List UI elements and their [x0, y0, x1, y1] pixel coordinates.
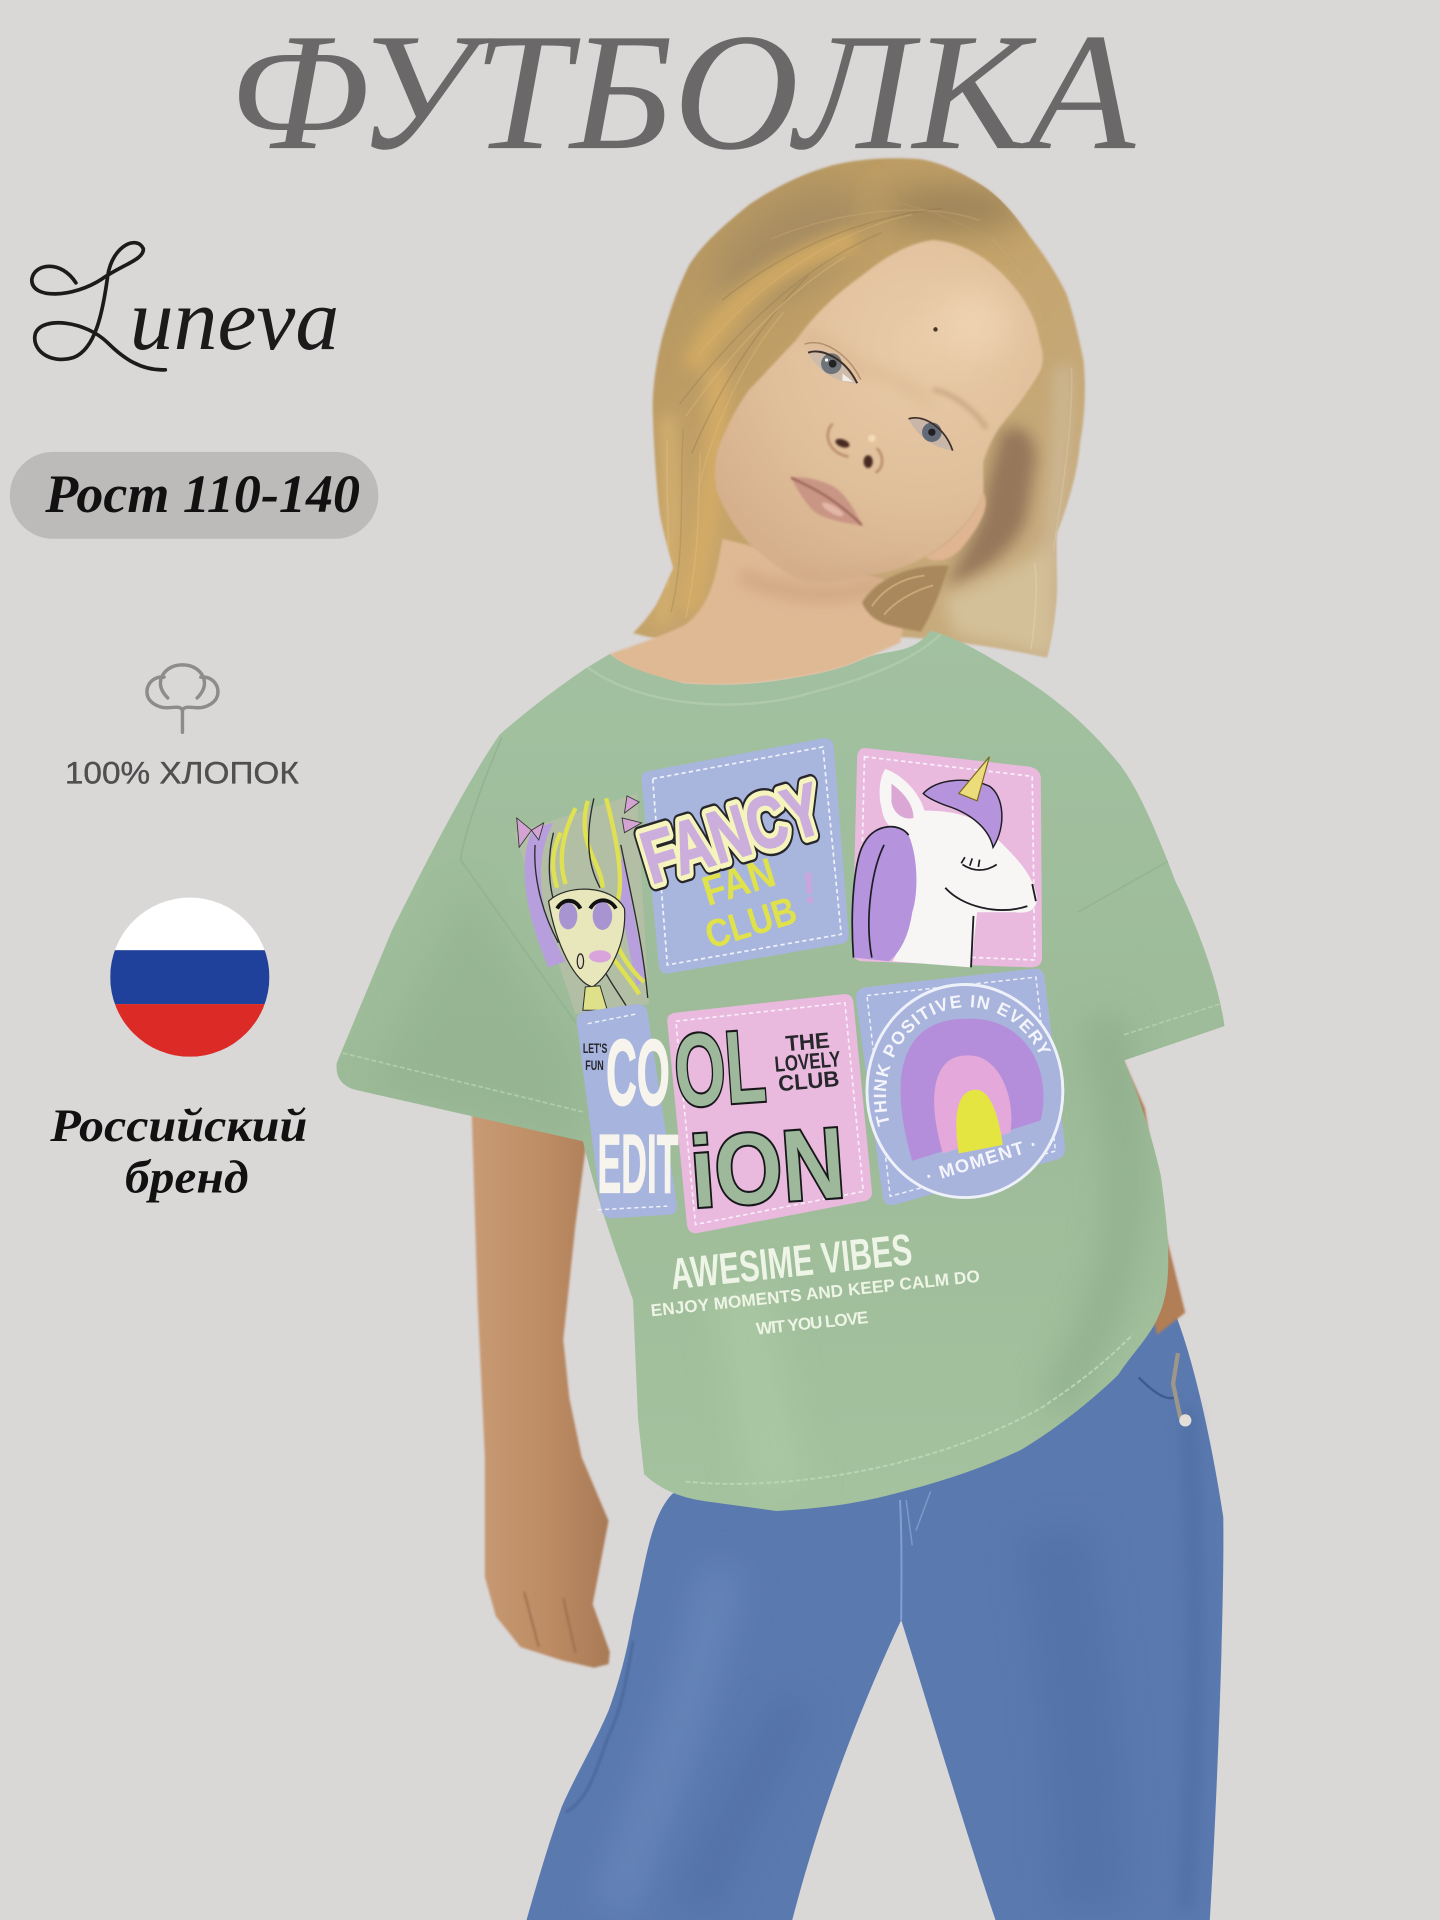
brand logo: Luneva: uneva	[130, 271, 339, 369]
mole	[933, 327, 938, 332]
neck shadow	[741, 576, 888, 595]
cool edition left blue patch: FUN	[585, 1058, 604, 1073]
fancy patch: CLUB	[700, 889, 802, 958]
height pill: Рост 110-140	[44, 464, 360, 524]
fancy patch	[632, 738, 849, 974]
shirt print	[514, 738, 1066, 1339]
brand origin text: бренд	[125, 1153, 249, 1204]
height pill	[10, 452, 378, 539]
rainbow badge patch: · MOMENT ·	[923, 1133, 1041, 1187]
fancy patch: FANCY	[632, 766, 832, 899]
left eye	[804, 343, 861, 383]
cool edition pink patch	[667, 994, 872, 1233]
slogan	[650, 1225, 981, 1339]
cotton label: 100% ХЛОПОК	[65, 755, 299, 791]
ear	[924, 492, 986, 560]
rainbow badge patch: THINK POSITIVE IN EVERY	[874, 995, 1052, 1127]
right arm	[1102, 1053, 1185, 1335]
cool edition pink patch: OL	[671, 1008, 769, 1129]
shirt	[336, 631, 1224, 1511]
unicorn patch	[852, 748, 1042, 967]
brand logo: Luneva	[32, 241, 339, 376]
cool edition pink patch: iON	[687, 1107, 849, 1229]
left arm	[471, 1102, 610, 1668]
face	[715, 240, 1043, 583]
brand origin text: Российский	[49, 1101, 307, 1152]
cool edition left blue patch	[577, 1004, 678, 1218]
icon: russian flag	[110, 898, 269, 1057]
slogan: ENJOY MOMENTS AND KEEP CALM DO	[650, 1266, 981, 1320]
right eye	[909, 417, 953, 451]
brand origin text	[49, 1101, 307, 1204]
cool edition pink patch: CLUB	[777, 1066, 840, 1096]
neck	[610, 539, 906, 685]
fancy patch: !	[800, 864, 819, 914]
facial shading	[784, 290, 1010, 576]
cool edition left blue patch: CO	[606, 1020, 670, 1124]
fancy patch: FAN	[697, 848, 781, 915]
cool edition pink patch: LOVELY	[773, 1046, 842, 1077]
fancy patch: FANCY	[632, 766, 832, 899]
nose	[828, 424, 882, 473]
slogan: WIT YOU LOVE	[755, 1307, 869, 1339]
cool edition pink patch: THE	[784, 1028, 831, 1056]
anime girl patch	[514, 793, 649, 1014]
fancy patch: FANCY	[632, 766, 832, 899]
jeans	[527, 1311, 1223, 1920]
rainbow badge patch	[856, 968, 1066, 1205]
hair curl	[862, 565, 949, 632]
slogan: AWESIME VIBES	[668, 1225, 914, 1299]
title: ФУТБОЛКА	[229, 0, 1137, 185]
hair	[633, 158, 1085, 658]
icon: cotton	[147, 665, 218, 732]
shirt print: EDIT	[598, 1118, 678, 1211]
girl illustration	[336, 156, 1224, 1920]
mouth	[791, 477, 862, 525]
cool edition left blue patch: LET'S	[583, 1041, 607, 1056]
